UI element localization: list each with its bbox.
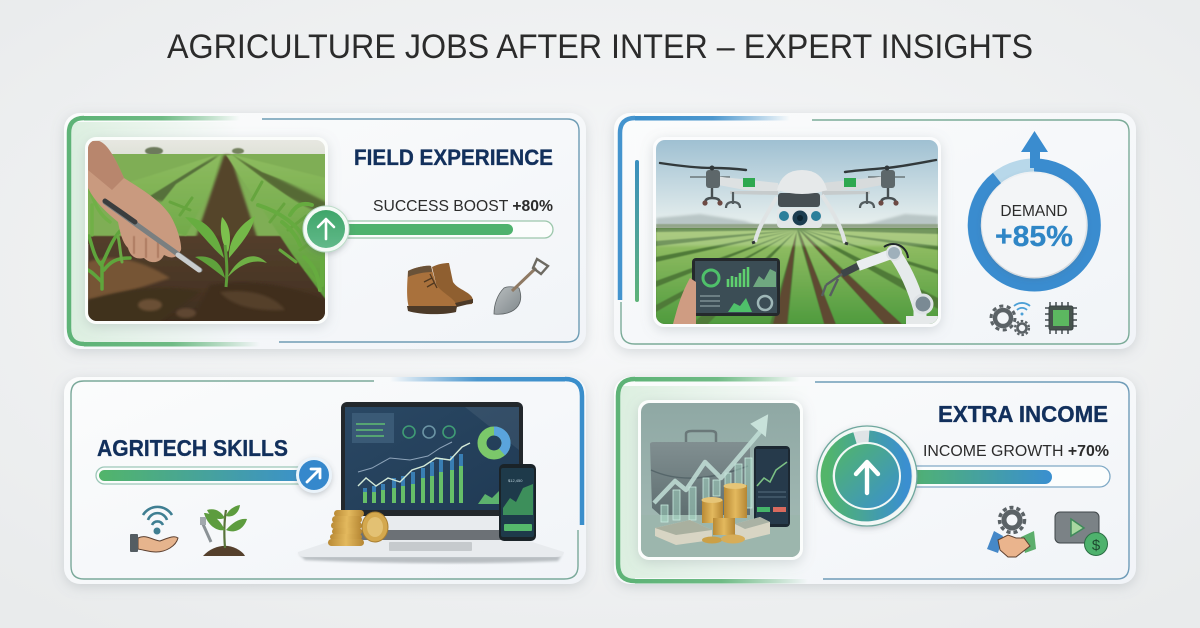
heading: FIELD EXPERIENCE xyxy=(354,145,553,170)
tablet xyxy=(692,258,780,316)
cash and coins xyxy=(655,520,712,545)
icon: chip xyxy=(1045,302,1077,334)
drone xyxy=(660,160,936,244)
drone photo xyxy=(653,137,941,327)
laptop xyxy=(298,402,564,563)
icon: up arrow badge xyxy=(303,206,349,252)
crop rows xyxy=(656,230,938,324)
phone xyxy=(499,464,536,541)
title: AGRICULTURE JOBS AFTER INTER – EXPERT INSIGHTS xyxy=(167,28,1033,66)
panel: field experience xyxy=(64,113,586,349)
demand gauge: +85% xyxy=(995,221,1073,253)
progress bar xyxy=(330,221,553,238)
soil furrows in mid field xyxy=(195,155,258,240)
icon: boots xyxy=(407,263,473,314)
coins xyxy=(328,510,388,546)
income ring badge xyxy=(817,426,917,526)
field photo xyxy=(85,137,328,324)
dashboard xyxy=(352,413,506,504)
glass bars xyxy=(661,458,752,522)
demand gauge xyxy=(974,131,1094,285)
stat label: SUCCESS BOOST +80% xyxy=(373,198,553,215)
progress bar xyxy=(900,466,1110,487)
phone xyxy=(754,446,790,527)
furrows xyxy=(773,232,902,324)
panel: agritech skills xyxy=(64,377,586,584)
robot arm xyxy=(822,244,938,324)
icon: sprout xyxy=(200,505,247,556)
icon: video with dollar: $ xyxy=(1092,537,1101,554)
probe tool xyxy=(105,202,200,270)
icon: gauge arrow xyxy=(1021,131,1048,168)
heading: EXTRA INCOME xyxy=(938,401,1108,427)
demand gauge: DEMAND xyxy=(1000,203,1068,220)
icon: hand with wifi xyxy=(130,507,178,552)
growth arrow xyxy=(654,426,765,503)
icon: gears and wifi xyxy=(991,303,1030,335)
crop rows xyxy=(130,155,326,300)
briefcase xyxy=(686,431,716,442)
progress bar xyxy=(96,467,316,484)
heading: AGRITECH SKILLS xyxy=(97,435,288,461)
icon: shovel xyxy=(494,259,548,314)
soil clods xyxy=(88,258,170,300)
panel: extra income xyxy=(614,377,1136,584)
panel: tech demand xyxy=(614,113,1136,349)
income photo xyxy=(638,400,803,560)
icon: up arrow xyxy=(856,462,878,493)
phone: $12,450 xyxy=(508,478,523,483)
hand xyxy=(88,141,181,262)
icon: diagonal arrow badge xyxy=(296,457,332,493)
seedlings xyxy=(185,216,267,278)
stat label: INCOME GROWTH +70% xyxy=(923,443,1109,460)
icon: video with dollar xyxy=(1055,512,1108,556)
icon: handshake and gear xyxy=(987,508,1036,557)
